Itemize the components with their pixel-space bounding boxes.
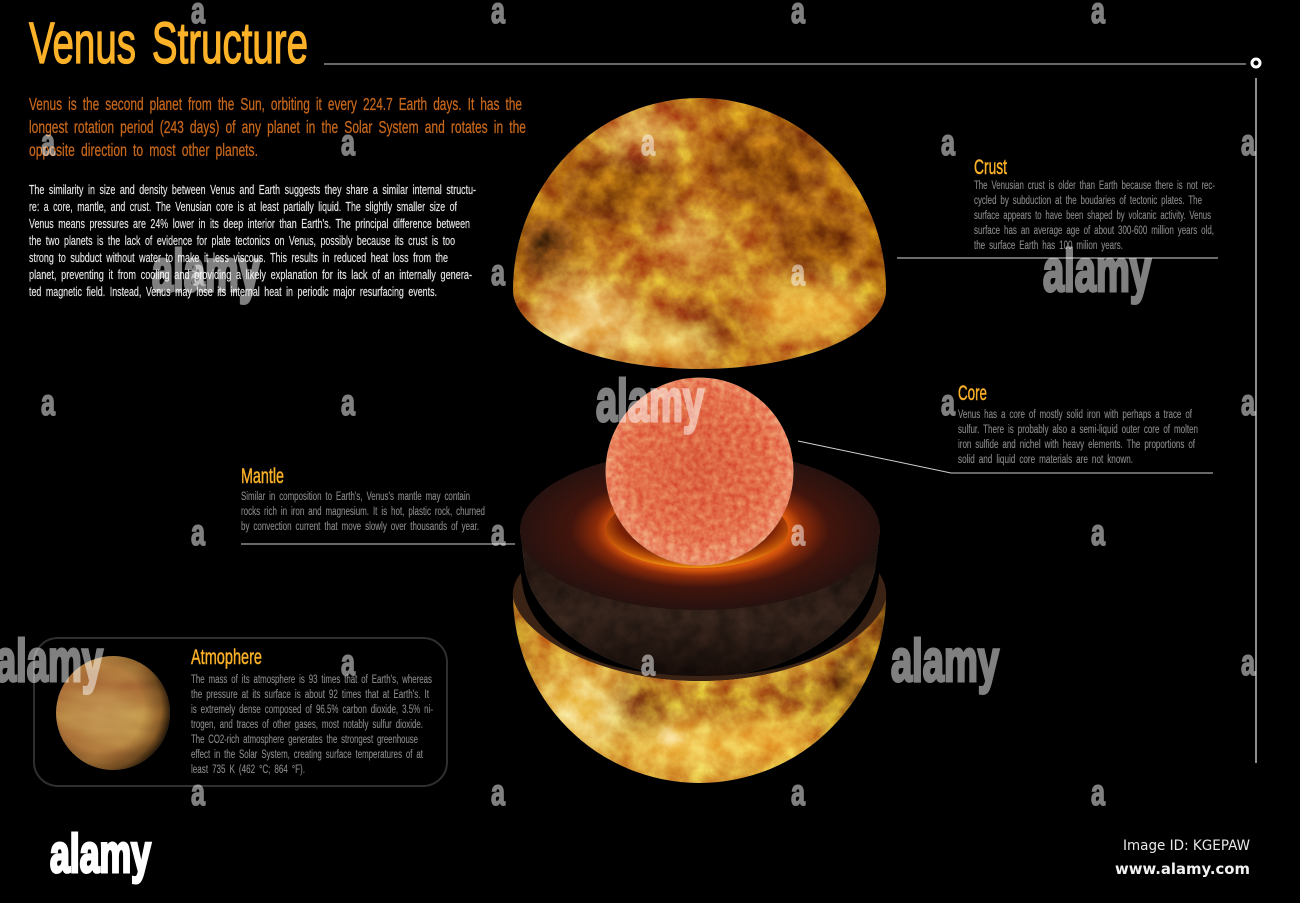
watermarks: a: [191, 252, 205, 293]
hemisphere surface: [513, 595, 886, 783]
watermarks: a: [791, 512, 805, 553]
watermarks: a: [191, 512, 205, 553]
description: rocks rich in iron and magnesium. It is hot, plastic rock, churned: [241, 506, 485, 518]
watermarks: a: [1091, 512, 1105, 553]
crust hemisphere (upper): [513, 98, 886, 369]
intro text: [29, 94, 526, 160]
image credit: www.alamy.com: [1115, 860, 1250, 878]
watermarks: alamy: [152, 238, 260, 304]
leader: mantle: [241, 543, 515, 545]
watermarks: a: [191, 772, 205, 813]
watermarks: a: [341, 122, 355, 163]
panel: crust: [974, 156, 1215, 252]
icon: Venus atmosphere globe: [56, 656, 170, 770]
body text: strong to subduct without water to make it less viscous. This results in reduced heat loss from the: [29, 250, 448, 265]
watermarks: a: [1241, 382, 1255, 423]
heading: Atmophere: [191, 646, 262, 669]
panel outline: [34, 638, 447, 786]
image credit: [1115, 838, 1250, 878]
mantle disc: [520, 450, 880, 677]
watermarks: a: [941, 382, 955, 423]
description: the surface Earth has 100 milion years.: [974, 240, 1123, 252]
description: [241, 491, 485, 533]
hemisphere cut rim: [513, 573, 886, 681]
description: [191, 674, 433, 776]
description: iron sulfide and nichel with heavy elements. The proportions of: [958, 439, 1196, 451]
watermarks: a: [41, 382, 55, 423]
mantle top face: [520, 450, 880, 610]
description: is extremely dense composed of 96.5% carbon dioxide, 3.5% ni-: [191, 704, 433, 716]
heading: Core: [958, 382, 987, 405]
lower crust hemisphere: [513, 573, 886, 783]
intro text: Venus is the second planet from the Sun, orbiting it every 224.7 Earth days. It has the: [29, 94, 522, 114]
description: least 735 K (462 °C; 864 °F).: [191, 764, 305, 776]
description: effect in the Solar System, creating surface temperatures of at: [191, 749, 424, 761]
watermarks: alamy: [596, 368, 704, 434]
description: by convection current that move slowly over thousands of year.: [241, 521, 479, 533]
core sphere: [606, 378, 794, 566]
body text: planet, preventing it from cooling and providing a likely explanation for its lack of an internally genera-: [29, 267, 472, 282]
watermarks: a: [341, 382, 355, 423]
intro text: longest rotation period (243 days) of any planet in the Solar System and rotates in the: [29, 117, 526, 137]
panel: mantle: [241, 465, 485, 533]
body text: ted magnetic field. Instead, Venus may lose its internal heat in periodic major resurfacing events.: [29, 284, 437, 299]
description: solid and liquid core materials are not known.: [958, 454, 1133, 466]
heading: Mantle: [241, 465, 284, 488]
watermarks: alamy: [891, 628, 999, 694]
watermarks: a: [641, 642, 655, 683]
panel: atmosphere: [34, 638, 447, 786]
watermarks: a: [1091, 772, 1105, 813]
watermarks: a: [941, 122, 955, 163]
mantle wall: [520, 530, 880, 677]
watermarks: a: [491, 252, 505, 293]
title rule with ring and vertical rule: [324, 59, 1260, 763]
watermarks: a: [41, 122, 55, 163]
body text: The similarity in size and density between Venus and Earth suggests they share a similar internal structu-: [29, 182, 476, 197]
watermarks: a: [791, 772, 805, 813]
watermarks: a: [791, 252, 805, 293]
description: the pressure at its surface is about 92 times that at Earth's. It: [191, 689, 430, 701]
image credit: Image ID: KGEPAW: [1123, 838, 1250, 854]
core cavity: [606, 492, 788, 568]
watermarks: a: [491, 772, 505, 813]
logo: alamy: alamy: [50, 824, 151, 884]
watermarks: a: [1241, 122, 1255, 163]
watermarks: a: [491, 512, 505, 553]
watermarks: alamy: [1043, 238, 1151, 304]
body text: the two planets is the lack of evidence for plate tectonics on Venus, possibly because its crust is too: [29, 233, 455, 248]
description: The mass of its atmosphere is 93 times that of Earth's, whereas: [191, 674, 432, 686]
watermarks: alamy: [0, 628, 103, 694]
description: [958, 409, 1198, 466]
description: The CO2-rich atmosphere generates the strongest greenhouse: [191, 734, 418, 746]
body text: Venus means pressures are 24% lower in its deep interior than Earth's. The principal difference between: [29, 216, 470, 231]
description: [974, 180, 1215, 252]
heading: Crust: [974, 156, 1007, 179]
description: sulfur. There is probably also a semi-liquid outer core of molten: [958, 424, 1198, 436]
intro text: opposite direction to most other planets.: [29, 140, 258, 160]
body text: re: a core, mantle, and crust. The Venusian core is at least partially liquid. The slightly smaller size of: [29, 199, 457, 214]
watermarks: a: [1241, 642, 1255, 683]
panel: core: [958, 382, 1198, 466]
description: trogen, and traces of other gases, most notably sulfur dioxide.: [191, 719, 423, 731]
description: Venus has a core of mostly solid iron with perhaps a trace of: [958, 409, 1193, 421]
description: Similar in composition to Earth's, Venus's mantle may contain: [241, 491, 470, 503]
watermarks: a: [641, 122, 655, 163]
description: cycled by subduction at the boudaries of tectonic plates. The: [974, 195, 1202, 207]
body text: [29, 182, 476, 299]
watermarks: a: [341, 642, 355, 683]
leader: core: [798, 441, 1213, 473]
title: Venus Structure: [29, 11, 308, 76]
leader: crust: [897, 257, 1218, 259]
